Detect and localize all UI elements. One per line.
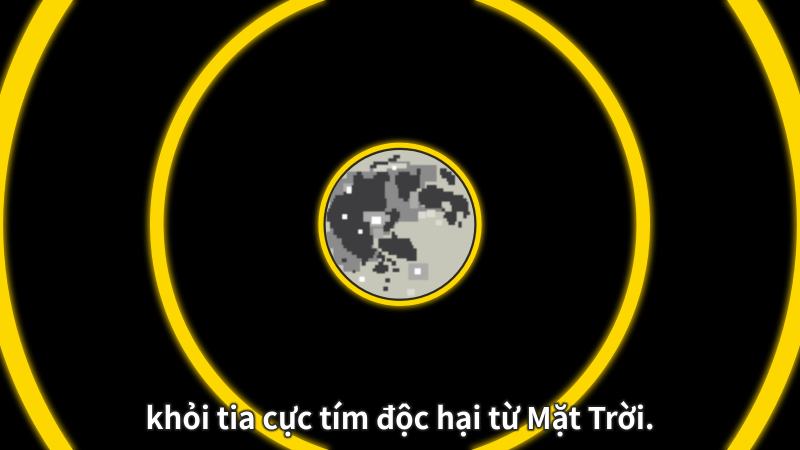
moon ring [321,145,479,304]
moon [321,145,479,304]
light area to the right of the seas [395,215,448,233]
highlights [342,166,421,282]
light mid patches [343,183,428,280]
pale band near upper edge [373,163,407,172]
moon surface [327,155,470,296]
dark maria as pixel rows [327,155,470,291]
middle yellow ring [150,0,650,450]
subtitle: khỏi tia cực tím độc hại từ Mặt Trời. [146,394,654,438]
subtitle: khỏi tia cực tím độc hại từ Mặt Trời. [146,394,654,438]
grey maria [327,162,443,272]
pale patches [407,210,442,296]
